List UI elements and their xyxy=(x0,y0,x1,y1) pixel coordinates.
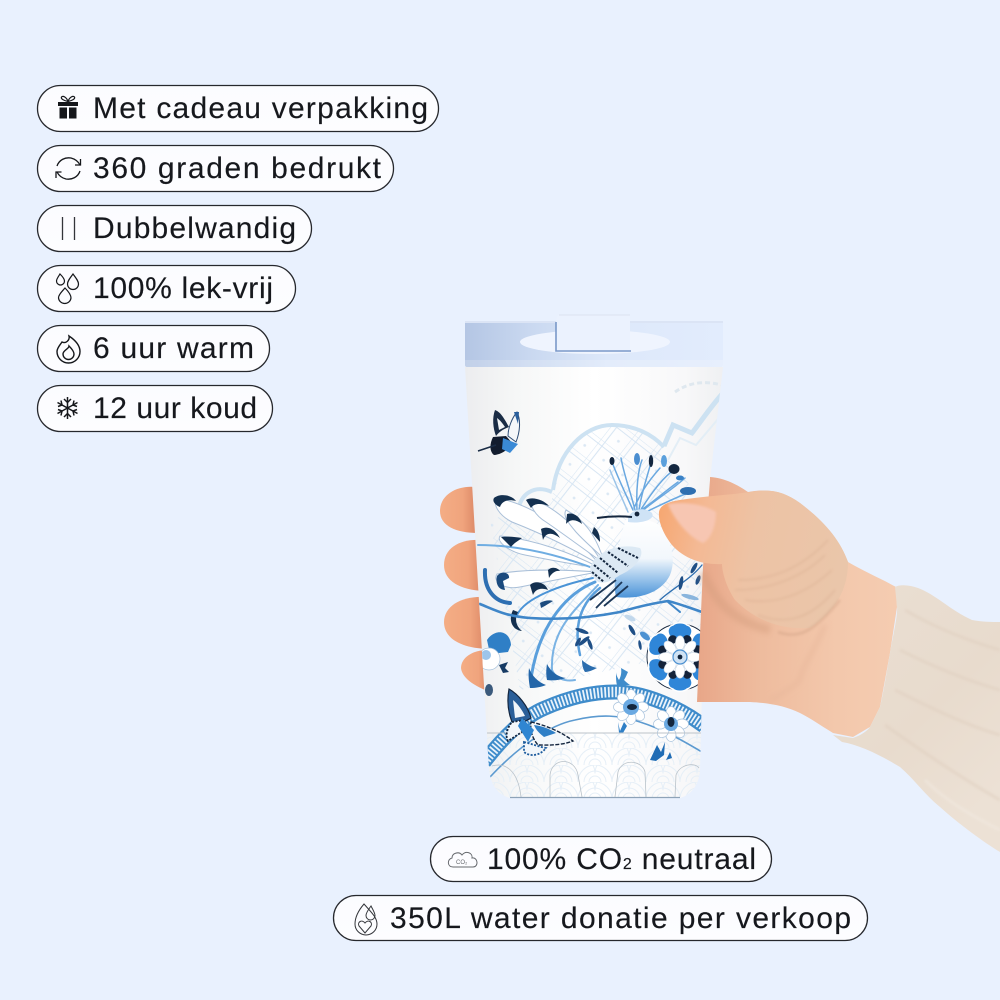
leaves and sprigs xyxy=(574,562,702,650)
pill: gift wrapping: Met cadeau verpakking xyxy=(93,92,428,125)
pill: 360 degrees printed xyxy=(38,146,394,192)
cup artwork xyxy=(478,383,724,798)
wave pattern base xyxy=(485,733,705,798)
base arches xyxy=(492,762,699,797)
pill: leak free xyxy=(38,266,296,312)
pill: 6 hours warm xyxy=(38,326,270,372)
icon: cloud CO2 xyxy=(448,852,477,867)
large flower xyxy=(646,622,700,690)
cup xyxy=(465,315,724,798)
lower butterfly xyxy=(507,689,573,755)
sleeve knit shading xyxy=(885,610,1000,830)
pill: double walled xyxy=(38,206,312,252)
lid xyxy=(465,315,723,367)
lower flowers xyxy=(614,668,688,761)
hand: palm and thumb in front of cup xyxy=(659,477,897,737)
left edge flower xyxy=(482,632,511,696)
pill: CO2 neutral: 100% CO2 neutraal xyxy=(487,843,756,876)
sweater sleeve xyxy=(833,585,1000,852)
lattice background xyxy=(480,420,705,690)
bird xyxy=(590,453,696,608)
bird tail feathers xyxy=(495,498,603,588)
cup body xyxy=(465,367,723,798)
horizontal seam xyxy=(487,732,701,734)
icon: drops with heart xyxy=(355,904,377,935)
icon: refresh arrows xyxy=(56,158,80,179)
pale blue arches xyxy=(518,383,724,512)
pill: gift wrapping xyxy=(38,86,438,132)
thumb creases xyxy=(735,540,840,635)
pill: CO2 neutral xyxy=(430,836,772,882)
bird wing xyxy=(590,546,641,583)
crest tips xyxy=(610,453,696,495)
icon: snowflake xyxy=(58,397,78,419)
upper butterfly xyxy=(478,410,520,455)
palm and wrist xyxy=(697,477,897,737)
pill: water donation: 350L water donatie per verkoop xyxy=(390,902,851,935)
icon: flame xyxy=(57,336,80,363)
thumb xyxy=(659,490,848,628)
hand: fingers behind the cup xyxy=(440,487,490,692)
cup base line xyxy=(510,796,680,798)
thumb nail xyxy=(668,503,716,543)
lid tab xyxy=(556,315,630,350)
bird crest xyxy=(610,458,690,514)
icon: cloud CO2: CO₂ xyxy=(456,860,468,866)
pill: 6 hours warm: 6 uur warm xyxy=(93,332,254,365)
branch xyxy=(480,565,702,619)
pill: double walled: Dubbelwandig xyxy=(93,212,296,245)
palm shadow xyxy=(770,625,825,700)
pill: 12 hours cold: 12 uur koud xyxy=(93,392,257,425)
bird head xyxy=(628,509,653,523)
pill: water donation xyxy=(334,896,868,940)
pill: leak free: 100% lek-vrij xyxy=(93,272,273,305)
bird body xyxy=(615,519,673,598)
icon: double wall lines xyxy=(62,217,74,240)
lid opening highlight xyxy=(520,330,670,354)
pill: 360 degrees printed: 360 graden bedrukt xyxy=(93,152,382,185)
icon: gift xyxy=(58,96,78,118)
bridge band xyxy=(484,692,704,777)
pill: 12 hours cold xyxy=(38,386,272,432)
tail feather eyes xyxy=(493,495,600,688)
icon: water drops xyxy=(56,274,78,304)
